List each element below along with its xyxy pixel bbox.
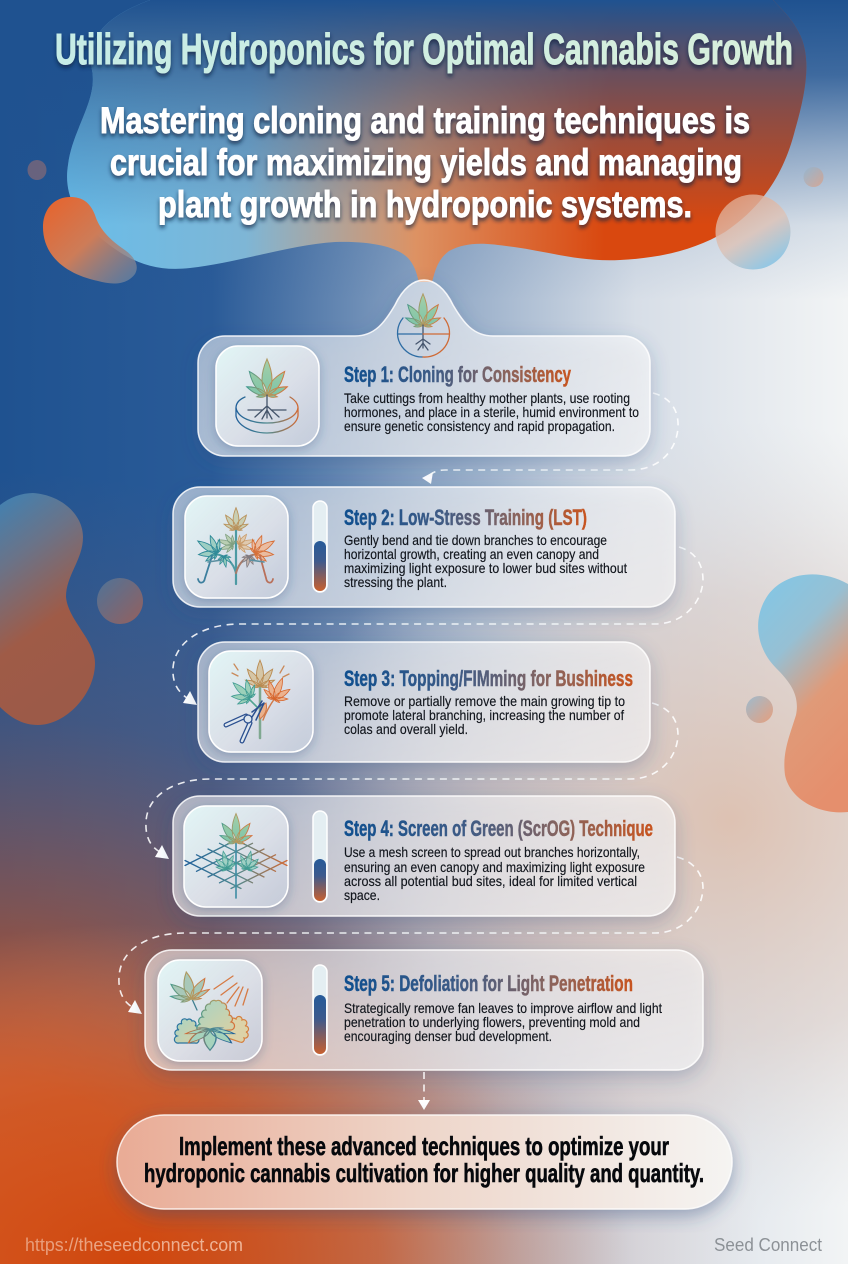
connector: step 1 to 2 — [422, 393, 678, 484]
body text: Gently bend and tie down branches to encourage — [344, 532, 607, 548]
connector: step 4 to 5 — [119, 857, 703, 1014]
header blob — [67, 0, 806, 282]
progress bar — [313, 811, 327, 902]
body text: promote lateral branching, increasing the number of — [344, 707, 624, 723]
panel: step 4 — [173, 796, 675, 916]
body text: Strategically remove fan leaves to improve airflow and light — [344, 1000, 662, 1016]
progress bar — [313, 965, 327, 1055]
body text — [344, 390, 639, 434]
arrow: step 5 to conclusion — [418, 1072, 430, 1110]
icon: tab plant with roots — [398, 294, 450, 357]
connector: step 3 to 4 — [146, 703, 678, 859]
panel: step 2 — [173, 487, 675, 607]
body text: Take cuttings from healthy mother plants, use rooting — [344, 390, 630, 406]
body text — [344, 693, 625, 737]
progress bar — [313, 501, 327, 592]
footer url: https://theseedconnect.com — [25, 1235, 243, 1255]
conclusion text: Implement these advanced techniques to optimize your — [179, 1131, 669, 1161]
circle: header right — [716, 194, 790, 270]
heading: Step 3: Topping/FIMming for Bushiness — [344, 666, 633, 691]
body text — [344, 844, 645, 903]
body text — [344, 1000, 662, 1044]
connector: step 2 to 3 — [173, 547, 703, 705]
heading: Step 5: Defoliation for Light Penetration — [344, 971, 633, 996]
body text: colas and overall yield. — [344, 721, 468, 737]
decorative circle: right middle — [746, 696, 773, 723]
body text: maximizing light exposure to lower bud sites without — [344, 560, 627, 576]
orange blob: header left — [43, 197, 137, 283]
body text: penetration to underlying flowers, preventing mold and — [344, 1014, 640, 1030]
body text: space. — [344, 887, 380, 903]
decorative blob: left side — [0, 493, 95, 725]
subtitle — [100, 100, 750, 225]
body text: Remove or partially remove the main growing tip to — [344, 693, 625, 709]
body text: encouraging denser bud development. — [344, 1028, 552, 1044]
icon tile: low-stress training — [185, 496, 288, 598]
body text: ensure genetic consistency and rapid propagation. — [344, 418, 615, 434]
heading: Step 1: Cloning for Consistency — [344, 362, 571, 387]
subtitle: plant growth in hydroponic systems. — [158, 184, 692, 225]
footer brand: Seed Connect — [714, 1235, 822, 1255]
body text: hormones, and place in a sterile, humid environment to — [344, 404, 639, 420]
heading: Step 4: Screen of Green (ScrOG) Technique — [344, 816, 653, 841]
body text: ensuring an even canopy and maximizing light exposure — [344, 859, 645, 875]
icon tile: cloning — [216, 346, 319, 446]
icon tile: pruning shears — [209, 651, 313, 752]
icon tile: defoliation — [158, 960, 262, 1061]
body text: across all potential bud sites, ideal for limited vertical — [344, 873, 637, 889]
panel: step 3 — [198, 642, 650, 762]
conclusion pill — [117, 1115, 732, 1209]
conclusion text — [144, 1131, 704, 1188]
decorative blob: right side — [758, 574, 848, 812]
body text: horizontal growth, creating an even canopy and — [344, 546, 599, 562]
panel: step 5 — [145, 950, 703, 1070]
small circle: header right — [804, 167, 824, 187]
body text: stressing the plant. — [344, 574, 447, 590]
heading: Step 2: Low-Stress Training (LST) — [344, 505, 587, 530]
panel: step 1 — [198, 280, 650, 456]
icon tile: screen of green — [184, 806, 288, 907]
small circle: header left — [28, 160, 46, 180]
decorative circle: left middle — [97, 578, 143, 624]
body text — [344, 532, 627, 590]
body text: Use a mesh screen to spread out branches horizontally, — [344, 844, 640, 860]
